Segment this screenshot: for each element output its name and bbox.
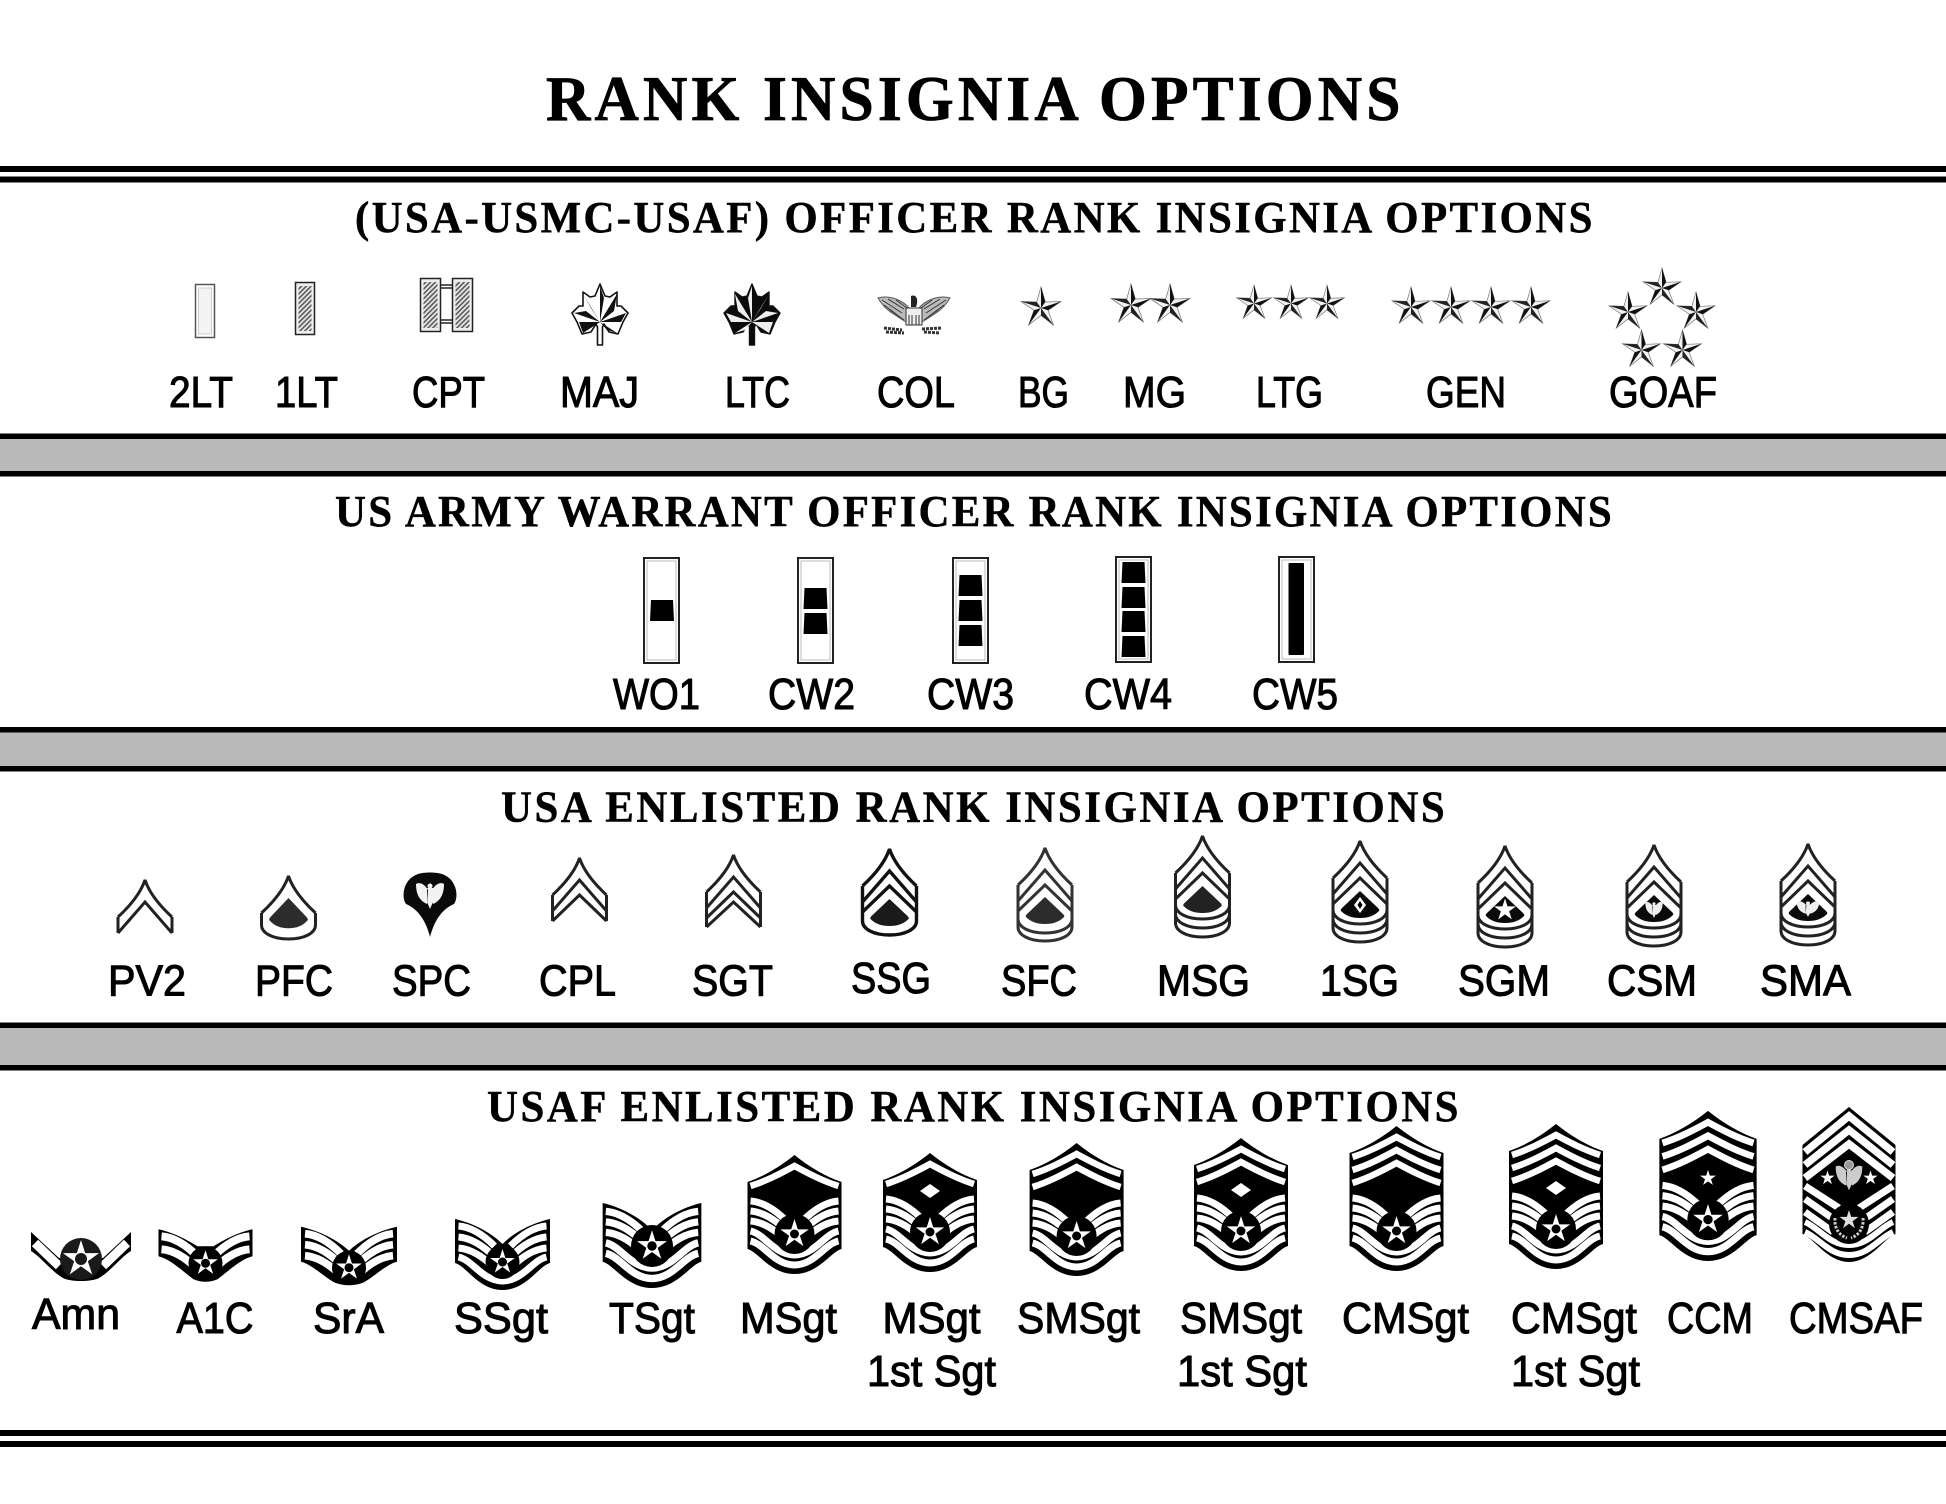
label: CMSgt 1st Sgt: 1st Sgt <box>1511 1347 1640 1396</box>
icon: LTC oak leaf <box>724 284 780 345</box>
label: SrA: SrA <box>313 1294 385 1343</box>
panel: officer ranks <box>169 193 1717 417</box>
label: Amn: Amn <box>32 1290 120 1339</box>
icon: CMSgt 1st Sgt stripes <box>1509 1124 1603 1269</box>
label: MSgt: MSgt <box>740 1294 837 1343</box>
heading: USAF enlisted: USAF ENLISTED RANK INSIGNIA OPTIONS <box>487 1082 1459 1131</box>
label: CW2: CW2 <box>768 670 855 719</box>
icon: CCM stripes <box>1659 1111 1757 1261</box>
icon: SPC eagle badge <box>404 872 456 937</box>
icon: MG stars <box>1111 284 1190 322</box>
divider band 2 <box>0 727 1946 772</box>
label: MG: MG <box>1123 368 1186 417</box>
icon: LTG stars <box>1237 285 1344 318</box>
label: CMSAF: CMSAF <box>1789 1294 1923 1343</box>
label: SSgt: SSgt <box>454 1294 548 1343</box>
label: 1SG: 1SG <box>1320 956 1399 1006</box>
icon: MSgt 1st Sgt stripes <box>883 1153 977 1272</box>
divider band 1 <box>0 434 1946 476</box>
label: COL: COL <box>877 368 955 417</box>
label: SMSgt 1st Sgt: SMSgt <box>1180 1294 1302 1343</box>
icon: SSG chevrons <box>862 849 916 935</box>
icon: WO1 bar <box>644 558 679 663</box>
icon: Amn stripe <box>31 1232 131 1281</box>
icon: 1SG chevrons <box>1333 841 1387 942</box>
label: MSgt 1st Sgt <box>867 1294 996 1396</box>
label: PFC: PFC <box>255 956 333 1006</box>
icon: A1C stripes <box>158 1229 252 1282</box>
icon: SFC chevrons <box>1018 848 1072 941</box>
label: SGT: SGT <box>692 956 773 1006</box>
label: SGM: SGM <box>1458 956 1550 1006</box>
label: CPT: CPT <box>412 368 485 417</box>
label: MSgt 1st Sgt: 1st Sgt <box>867 1347 996 1396</box>
label: CW4: CW4 <box>1084 670 1172 719</box>
label: SSG: SSG <box>851 954 931 1003</box>
icon: CMSgt stripes <box>1350 1126 1444 1271</box>
icon: PFC chevron and rocker <box>262 876 316 939</box>
icon: CPT bars <box>420 278 472 332</box>
label: MSgt 1st Sgt: MSgt <box>882 1294 980 1343</box>
label: SMSgt 1st Sgt <box>1177 1294 1307 1396</box>
panel: warrant officer ranks <box>335 487 1612 719</box>
icon: MSG chevrons <box>1176 836 1230 937</box>
label: BG: BG <box>1018 368 1069 417</box>
label: LTC: LTC <box>725 368 790 417</box>
bottom double rule <box>0 1430 1946 1447</box>
icon: COL eagle <box>878 296 950 333</box>
label: SMSgt: SMSgt <box>1017 1294 1140 1343</box>
icon: GOAF stars <box>1609 268 1715 366</box>
panel: USA enlisted ranks <box>108 783 1852 1006</box>
icon: CW4 bar <box>1116 557 1151 662</box>
top double rule <box>0 166 1946 182</box>
label: MSG: MSG <box>1157 956 1250 1006</box>
icon: SrA stripes <box>301 1227 397 1285</box>
label: CMSgt 1st Sgt: CMSgt <box>1511 1294 1637 1343</box>
icon: MSgt stripes <box>748 1155 842 1274</box>
heading: officer: (USA-USMC-USAF) OFFICER RANK INSIGNIA OPTIONS <box>355 193 1592 242</box>
icon: SSgt stripes <box>455 1219 550 1290</box>
icon: BG star <box>1021 287 1061 325</box>
label: CCM: CCM <box>1667 1294 1753 1343</box>
panel: USAF enlisted ranks <box>31 1082 1923 1396</box>
icon: 2LT bar <box>196 284 214 338</box>
icon: CMSAF stripes <box>1802 1107 1896 1262</box>
label: LTG: LTG <box>1256 368 1323 417</box>
label: 2LT: 2LT <box>169 368 233 417</box>
label: PV2: PV2 <box>108 956 186 1006</box>
icon: CW3 bar <box>953 558 988 663</box>
icon: SMSgt 1st Sgt stripes <box>1194 1138 1288 1271</box>
label: MAJ: MAJ <box>560 368 639 417</box>
icon: CPL chevrons <box>552 858 606 921</box>
label: CPL: CPL <box>539 956 616 1006</box>
heading: USA enlisted: USA ENLISTED RANK INSIGNIA OPTIONS <box>501 783 1445 832</box>
label: GEN: GEN <box>1426 368 1506 417</box>
icon: SMSgt stripes <box>1030 1143 1124 1276</box>
label: CSM: CSM <box>1607 956 1697 1006</box>
divider band 3 <box>0 1022 1946 1070</box>
icon: CW5 bar <box>1279 557 1314 662</box>
label: CMSgt 1st Sgt <box>1511 1294 1640 1396</box>
label: CW3: CW3 <box>927 670 1014 719</box>
label: A1C: A1C <box>176 1294 254 1343</box>
label: CW5: CW5 <box>1252 670 1338 719</box>
label: 1LT: 1LT <box>275 368 338 417</box>
icon: SMA chevrons <box>1781 844 1835 945</box>
icon: MAJ oak leaf <box>572 284 628 345</box>
icon: PV2 chevron <box>118 880 172 933</box>
heading: warrant officer: US ARMY WARRANT OFFICER RANK INSIGNIA OPTIONS <box>335 487 1612 536</box>
icon: SGT chevrons <box>706 855 760 927</box>
icon: 1LT bar <box>296 282 314 334</box>
title: RANK INSIGNIA OPTIONS <box>546 63 1400 134</box>
label: WO1: WO1 <box>613 670 700 719</box>
icon: GEN stars <box>1392 287 1550 323</box>
label: TSgt: TSgt <box>609 1294 695 1343</box>
label: SMA: SMA <box>1760 956 1852 1006</box>
icon: CSM chevrons <box>1627 845 1681 946</box>
label: SFC: SFC <box>1001 956 1077 1006</box>
icon: CW2 bar <box>798 558 833 663</box>
icon: TSgt stripes <box>603 1203 701 1288</box>
label: SMSgt 1st Sgt: 1st Sgt <box>1177 1347 1307 1396</box>
icon: SGM chevrons <box>1478 846 1532 947</box>
label: GOAF: GOAF <box>1609 368 1717 417</box>
label: CMSgt: CMSgt <box>1342 1294 1469 1343</box>
label: SPC: SPC <box>392 956 471 1006</box>
